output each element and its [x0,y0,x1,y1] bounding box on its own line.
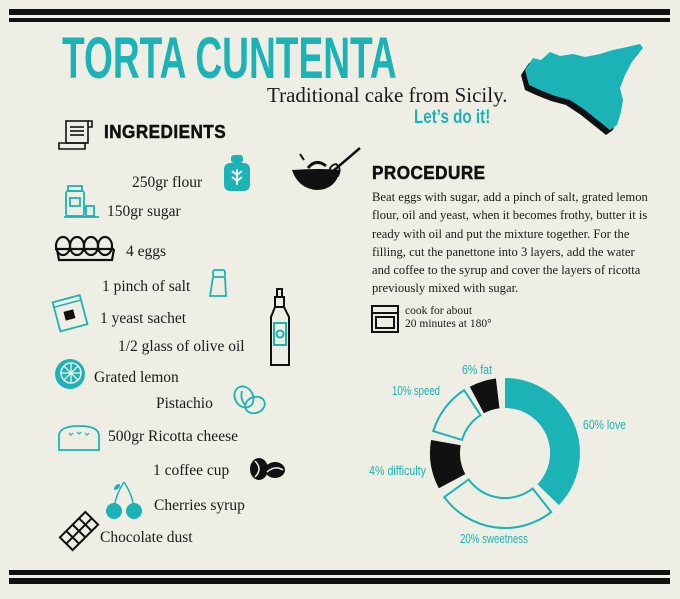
text: chocolate: Chocolate dust [100,529,193,546]
title: TORTA CUNTENTA [62,26,397,91]
labels: chart: 6% fat [462,362,492,377]
bottom bars [9,570,670,584]
icon: oil bottle [270,288,290,366]
text: yeast: 1 yeast sachet [100,310,186,327]
text: cook time: 20 minutes at 180° [405,318,492,330]
text: ricotta: 500gr Ricotta cheese [108,428,238,445]
text: procedure [372,190,648,295]
text: procedure: previously mixed with sugar. [372,281,518,295]
heading: procedure: PROCEDURE [372,163,486,183]
icon: pistachio [234,386,266,414]
labels: chart: 60% love [583,417,626,432]
text: sugar: 150gr sugar [107,203,181,220]
subtitle: Traditional cake from Sicily. [267,83,508,107]
icon: sicily map [521,44,643,135]
icon: chocolate [58,510,100,552]
text: lemon: Grated lemon [94,369,179,386]
icon: oven [371,305,399,333]
icon: coffee beans [250,458,285,480]
icon: recipe scroll [58,120,93,150]
labels: chart: 10% speed [392,383,440,398]
icon: flour bag [224,155,250,191]
text: coffee: 1 coffee cup [153,462,229,479]
icon: yeast sachet [52,294,88,332]
icon: bowl and whisk [292,147,361,190]
text: procedure: ready with oil and put the mixture together. For the [372,227,629,241]
donut chart [369,362,626,546]
ingredient list [52,155,290,552]
text: procedure: and coffee to the syrup and cover the layers of ricotta [372,263,640,277]
icon: ricotta [58,425,100,451]
icon: lemon [55,359,85,389]
icon: sugar jar [64,185,99,218]
heading: ingredients: INGREDIENTS [104,122,226,142]
labels: chart [369,362,626,546]
text: pistachio: Pistachio [156,395,213,412]
icon: salt shaker [209,269,227,297]
text: procedure: filling, cut the panettone into 3 layers, add the water [372,245,635,259]
labels: chart: 20% sweetness [460,531,528,546]
text: flour: 250gr flour [132,174,202,191]
top bars [9,9,670,22]
text: salt: 1 pinch of salt [102,278,190,295]
text: procedure: flour, oil and yeast, when it becomes frothy, butter it is [372,208,647,222]
text: eggs: 4 eggs [126,243,166,260]
tagline: Let’s do it! [414,107,490,128]
icon: eggs [54,236,116,262]
icon: cherries [106,482,142,519]
labels: chart: 4% difficulty [369,463,426,478]
text: cherries: Cherries syrup [154,497,245,514]
text: procedure: Beat eggs with sugar, add a pinch of salt, grated lemon [372,190,648,204]
text: olive oil: 1/2 glass of olive oil [118,338,245,355]
text: cook time: cook for about [405,305,472,317]
text: cook time [405,305,492,330]
